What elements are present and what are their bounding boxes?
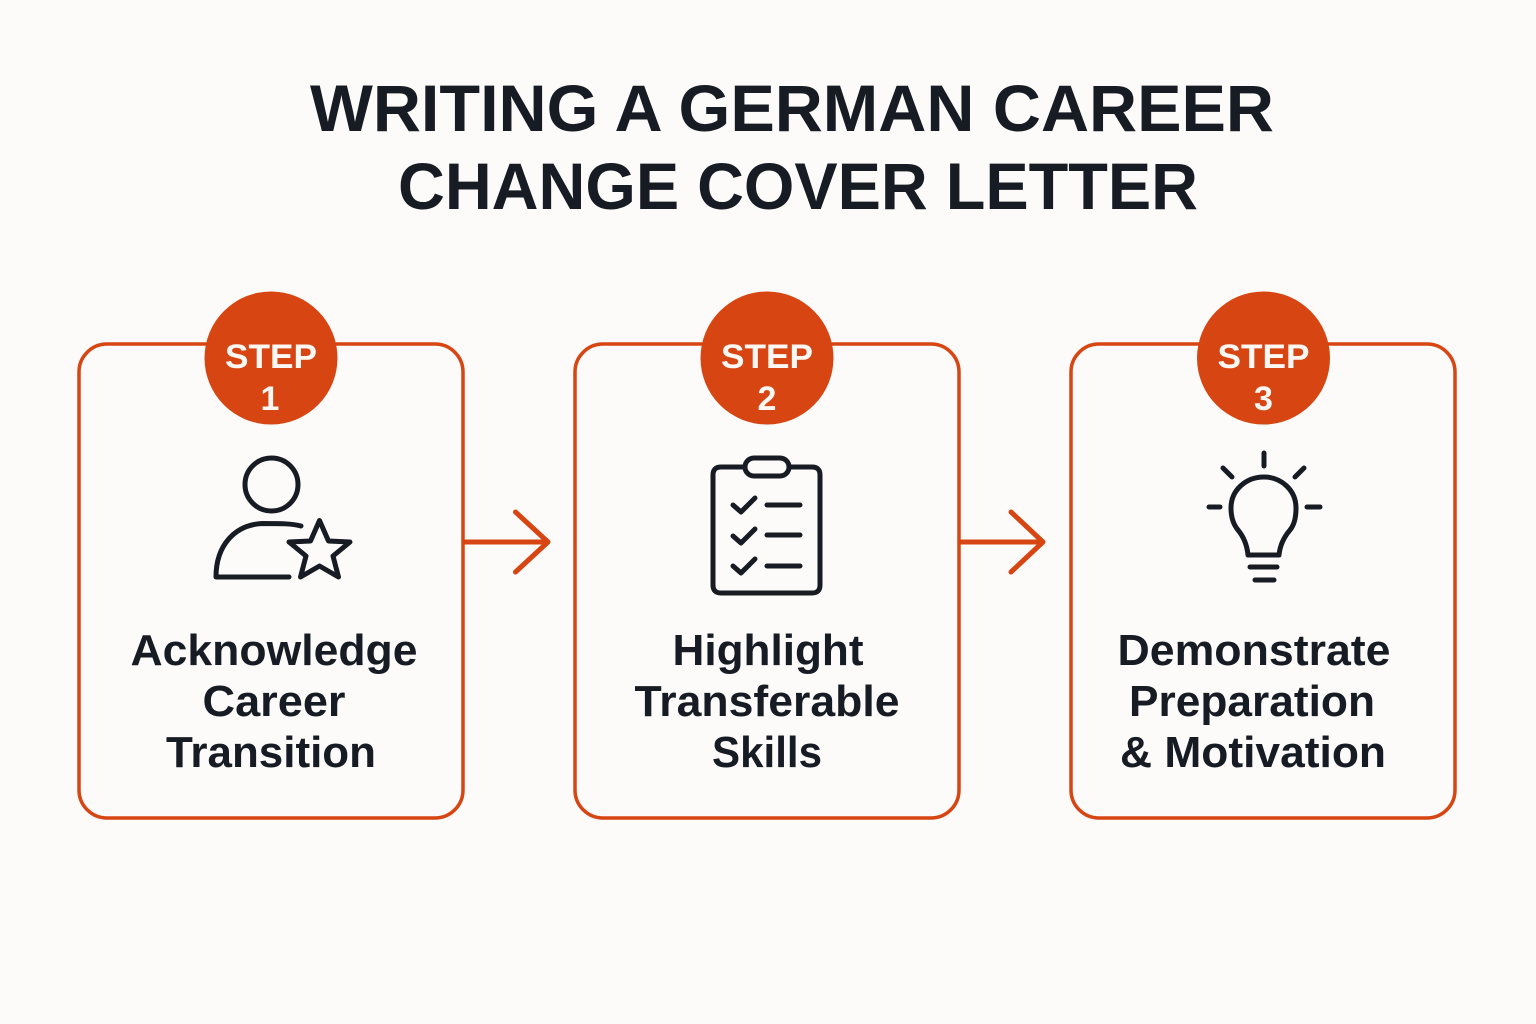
step 3 label: & Motivation <box>1120 728 1386 777</box>
step 2 card border <box>575 344 959 818</box>
icon: light bulb <box>1209 453 1320 580</box>
step 2 label: Skills <box>712 728 822 777</box>
step 3 label: Preparation <box>1129 677 1375 726</box>
arrow: step 1 to step 2 <box>464 512 548 572</box>
panel: step 2 <box>575 292 959 818</box>
step 3 badge: STEP <box>1218 338 1310 376</box>
step 1 card border <box>79 344 463 818</box>
step 1 label <box>130 626 418 777</box>
step 1 label: Career <box>202 677 346 726</box>
title <box>310 71 1274 223</box>
step 2 label: Highlight <box>672 626 864 675</box>
step 2 badge: STEP <box>721 338 813 376</box>
step 2 label: Transferable <box>634 677 900 726</box>
step 1 label: Transition <box>166 728 376 777</box>
step 2 label <box>634 626 900 777</box>
step 2 badge <box>700 292 834 424</box>
icon: person with star <box>216 458 350 577</box>
step 3 card border <box>1071 344 1455 818</box>
step 3 label: Demonstrate <box>1118 626 1390 675</box>
step 2 badge: 2 <box>758 380 776 418</box>
step 1 badge: 1 <box>261 380 279 418</box>
arrow: step 2 to step 3 <box>960 512 1043 572</box>
step 1 label: Acknowledge <box>130 626 418 675</box>
title: WRITING A GERMAN CAREER <box>310 71 1274 145</box>
step 3 badge: 3 <box>1254 380 1273 418</box>
icon: clipboard checklist <box>713 458 820 593</box>
panel: step 3 <box>1071 292 1455 818</box>
step 1 badge: STEP <box>225 338 317 376</box>
step 1 badge <box>204 292 338 424</box>
step 3 badge <box>1197 292 1330 424</box>
step 3 label <box>1118 626 1390 777</box>
title: CHANGE COVER LETTER <box>398 149 1198 223</box>
panel: step 1 <box>79 292 463 818</box>
